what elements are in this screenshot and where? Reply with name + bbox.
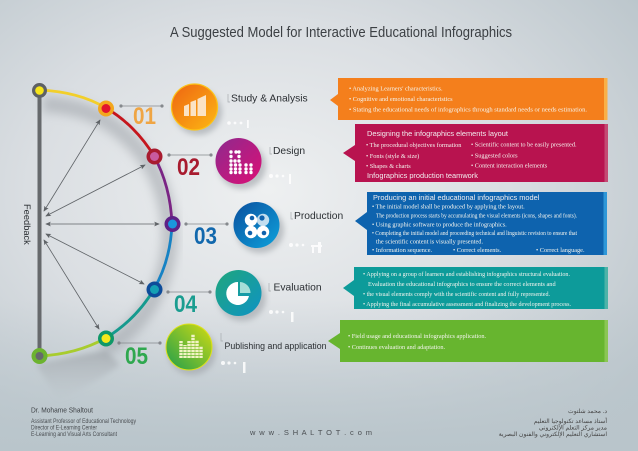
- panel: production: the scientific content is visually presented.: [376, 238, 483, 246]
- feedback arrows: [44, 120, 159, 329]
- step numbers: 01: [133, 103, 156, 130]
- footer: author english: E-Learning and Visual Arts Consultant: [31, 432, 117, 438]
- panel: publishing: [328, 320, 608, 362]
- footer: author english: Director of E-Learning Center: [31, 426, 97, 432]
- footer: website: w w w . S H A L T O T . c o m: [249, 428, 372, 437]
- panel: study and analysis: [330, 78, 608, 120]
- arc nodes: [32, 83, 180, 364]
- step labels: Design: [273, 146, 305, 157]
- panel: design: • The procedural objectives formation: [366, 142, 462, 149]
- step labels: Publishing and application: [224, 341, 326, 351]
- panel: production: • Correct language.: [536, 247, 585, 254]
- step labels: Evaluation: [274, 282, 322, 294]
- panel: production: • The initial model shall be produced by applying the layout.: [372, 204, 525, 210]
- panel: study and analysis: • Analyzing Learners' characteristics.: [349, 86, 443, 92]
- panel: evaluation: • Applying on a group of learners and establishing infographics structural evaluation.: [363, 271, 570, 278]
- connector lines: [118, 105, 228, 344]
- panel: design: • Shapes & charts: [366, 163, 411, 170]
- footer: author arabic: مدير مركز التعلم الإلكتروني: [539, 424, 607, 432]
- step numbers: [125, 103, 217, 370]
- step labels: Production: [294, 211, 344, 222]
- footer: author arabic: استشاري التعليم الإلكتروني والفنون البصرية: [499, 431, 607, 438]
- panel: evaluation: • Applying the final accumulative assessment and finalizing the development process.: [363, 301, 571, 308]
- footer: author english: Assistant Professor of Educational Technology: [31, 419, 136, 425]
- step labels: [221, 94, 344, 351]
- step numbers: 03: [194, 223, 217, 250]
- panel: production: The production process starts by accumulating the visual elements (icons, shapes and fonts).: [376, 212, 577, 220]
- panel: design: • Suggested colors: [471, 152, 518, 160]
- panel: evaluation: Evaluation the educational infographics to ensure the correct elements and: [368, 281, 556, 288]
- icon: publishing circle: [166, 324, 216, 375]
- footer: author arabic: [499, 408, 607, 438]
- panel: design: • Fonts (style & size): [366, 153, 419, 160]
- panel: evaluation: • the visual elements comply with the scientific content and fully represented.: [363, 291, 550, 298]
- panel: evaluation: [343, 267, 608, 309]
- panel: production: • Correct elements.: [453, 247, 502, 254]
- step numbers: 04: [174, 291, 198, 318]
- icon: design circle: [216, 138, 266, 189]
- panel: production: [355, 192, 607, 255]
- footer: author english: [31, 406, 136, 438]
- step numbers: 05: [125, 343, 148, 370]
- panel: production: • Completing the initial model and proceeding technical and linguistic revision to ensure that: [372, 230, 577, 237]
- panel: design: Designing the infographics elements layout: [367, 129, 508, 138]
- footer: author arabic: د. محمد شلتوت: [568, 408, 607, 415]
- panel: publishing: • Field usage and educational infographics application.: [348, 333, 486, 340]
- panel: production: • Using graphic software to produce the infographics.: [372, 222, 507, 228]
- arc shadow: [36, 104, 170, 400]
- step numbers: 02: [177, 154, 200, 181]
- panel: design: [343, 124, 608, 182]
- icon: production circle: [234, 202, 284, 253]
- panel: design: • Scientific content to be easily presented.: [471, 142, 577, 148]
- panel: study and analysis: • Stating the educational needs of infographics through standard needs or needs estimation.: [349, 106, 587, 114]
- panel: production: Producing an initial educational infographics model: [373, 193, 540, 202]
- panel: publishing: • Continues evaluation and adaptation.: [348, 344, 446, 351]
- small white dots and figures: [221, 120, 322, 373]
- process arc: [39, 90, 172, 356]
- panel: design: • Content interaction elements: [471, 162, 548, 170]
- panel: design: Infographics production teamwork: [367, 171, 478, 180]
- footer: author english: Dr. Mohame Shaltout: [31, 406, 93, 414]
- icon: study circle: [172, 84, 222, 135]
- step labels: Study & Analysis: [231, 94, 308, 104]
- icon: evaluation circle: [216, 270, 266, 321]
- panel: production: • Information sequence.: [372, 247, 433, 254]
- feedback vertical bar: [38, 90, 42, 356]
- panel: study and analysis: • Cognitive and emotional characteristics: [349, 96, 453, 103]
- title: A Suggested Model for Interactive Educational Infographics: [170, 25, 512, 41]
- feedback label: Feedback: [22, 204, 32, 245]
- footer: author arabic: أستاذ مساعد تكنولوجيا التعليم: [534, 416, 607, 425]
